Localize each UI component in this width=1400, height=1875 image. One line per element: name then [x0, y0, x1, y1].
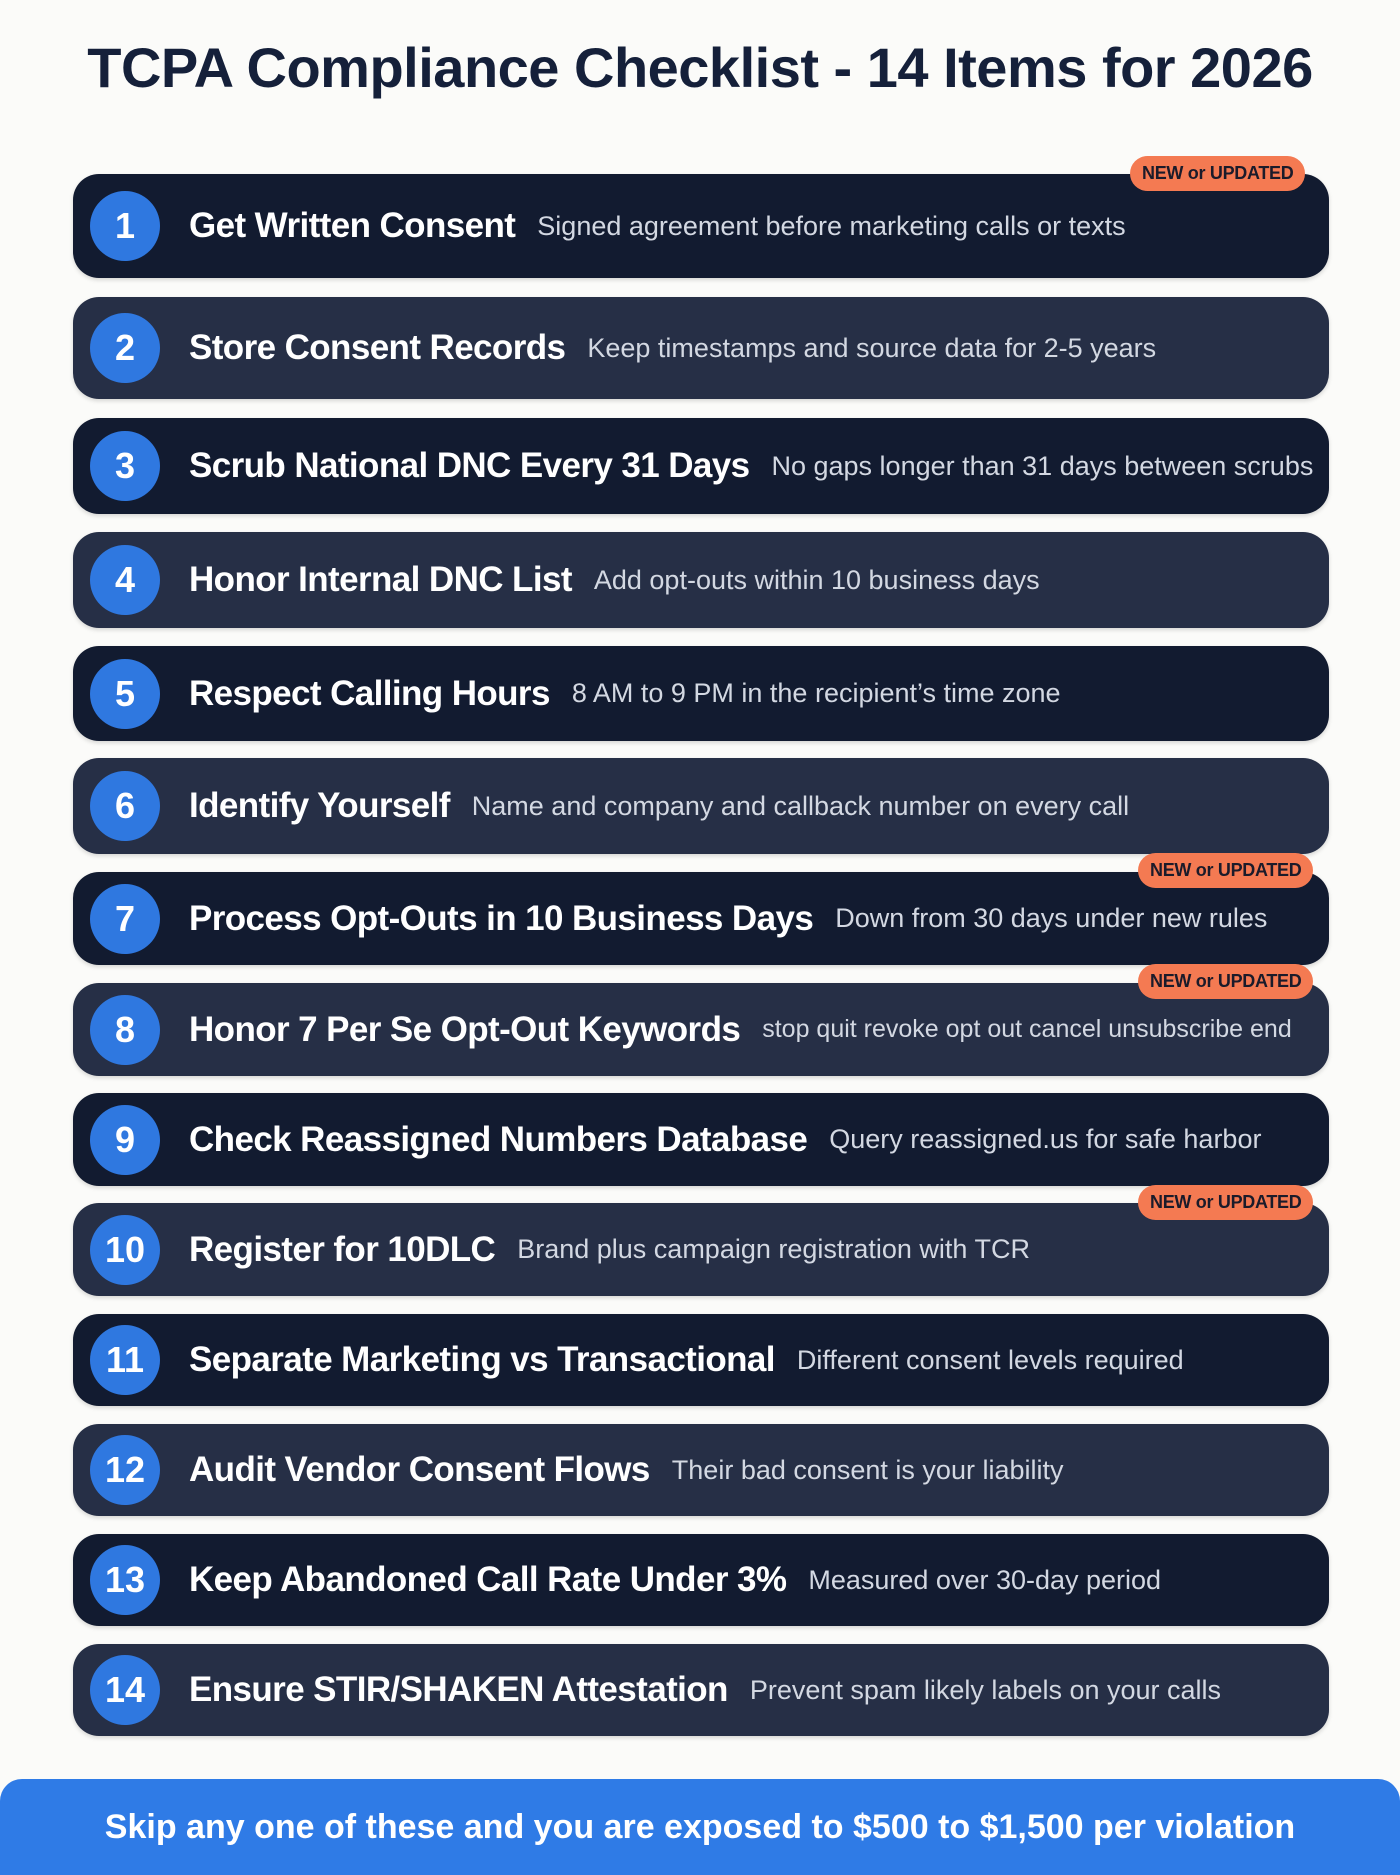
row 2: [73, 297, 1329, 399]
row 5: [73, 646, 1329, 741]
row 7: [73, 872, 1329, 965]
badge row 7: [1138, 853, 1313, 888]
badge row 1: [1130, 156, 1305, 191]
row 4: Honor Internal DNC List Add opt-outs within 10 business days: [189, 560, 1040, 599]
badge row 8: NEW or UPDATED: [1150, 971, 1301, 991]
title: TCPA Compliance Checklist - 14 Items for 2026: [87, 36, 1313, 99]
row 8: Honor 7 Per Se Opt-Out Keywords stop quit revoke opt out cancel unsubscribe end: [189, 1010, 1292, 1048]
row 13: [73, 1534, 1329, 1626]
row 1: Get Written Consent Signed agreement before marketing calls or texts: [189, 206, 1126, 245]
row 5: 5: [115, 672, 135, 714]
row 4: [73, 532, 1329, 628]
row 12: 12: [105, 1449, 145, 1490]
row 11: 11: [106, 1339, 144, 1380]
row 7: Process Opt-Outs in 10 Business Days Down from 30 days under new rules: [189, 898, 1267, 938]
row 13: 13: [105, 1559, 145, 1600]
badge row 7: NEW or UPDATED: [1150, 860, 1301, 880]
row 10: Register for 10DLC Brand plus campaign registration with TCR: [189, 1230, 1030, 1268]
footer banner: Skip any one of these and you are exposed to $500 to $1,500 per violation: [105, 1808, 1295, 1846]
row 11: Separate Marketing vs Transactional Different consent levels required: [189, 1340, 1184, 1379]
row 3: [73, 418, 1329, 514]
row 2: 2: [115, 327, 135, 368]
row 1: 1: [115, 205, 135, 246]
row 14: Ensure STIR/SHAKEN Attestation Prevent spam likely labels on your calls: [189, 1670, 1221, 1709]
row 9: Check Reassigned Numbers Database Query reassigned.us for safe harbor: [189, 1120, 1261, 1158]
badge row 1: NEW or UPDATED: [1142, 163, 1293, 183]
row 8: 8: [115, 1008, 135, 1050]
row 10: 10: [105, 1228, 145, 1270]
row 3: Scrub National DNC Every 31 Days No gaps longer than 31 days between scrubs: [189, 446, 1313, 485]
badge row 10: [1138, 1185, 1313, 1220]
row 6: 6: [115, 785, 135, 826]
row 14: 14: [105, 1669, 145, 1710]
row 1: [73, 174, 1329, 278]
row 4: 4: [115, 559, 135, 600]
row 5: Respect Calling Hours 8 AM to 9 PM in the recipient’s time zone: [189, 674, 1061, 712]
badge row 8: [1138, 964, 1313, 999]
row 12: [73, 1424, 1329, 1516]
row 12: Audit Vendor Consent Flows Their bad consent is your liability: [189, 1450, 1063, 1489]
row 13: Keep Abandoned Call Rate Under 3% Measured over 30-day period: [189, 1560, 1161, 1599]
row 11: [73, 1314, 1329, 1406]
row 14: [73, 1644, 1329, 1736]
footer banner: [0, 1779, 1400, 1875]
row 3: 3: [115, 445, 135, 486]
row 7: 7: [115, 898, 135, 938]
row 8: [73, 983, 1329, 1076]
row 6: [73, 758, 1329, 854]
row 10: [73, 1203, 1329, 1296]
row 6: Identify Yourself Name and company and callback number on every call: [189, 786, 1129, 825]
badge row 10: NEW or UPDATED: [1150, 1192, 1301, 1212]
row 9: [73, 1093, 1329, 1186]
row 9: 9: [115, 1118, 135, 1160]
row 2: Store Consent Records Keep timestamps and source data for 2-5 years: [189, 328, 1156, 367]
